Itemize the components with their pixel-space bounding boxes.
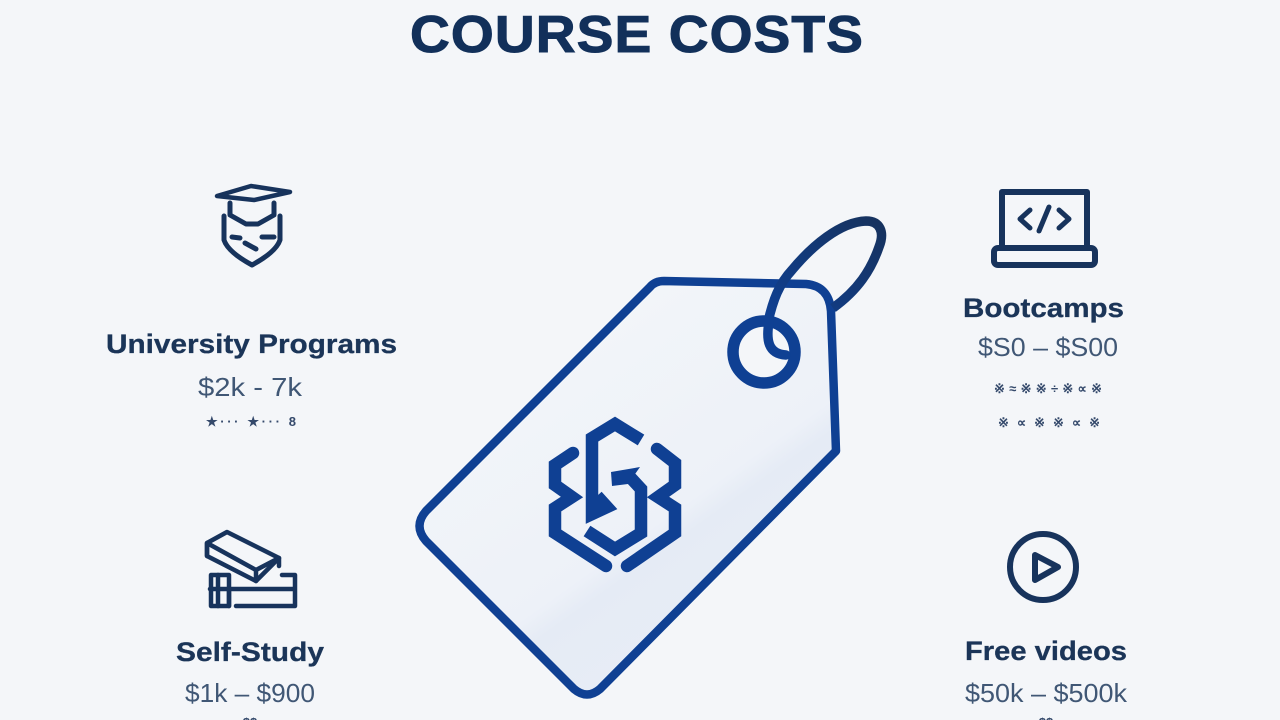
panel: university programs [106,186,397,429]
heading: Self-Study [176,637,324,667]
title: COURSE COSTS [410,6,864,64]
price tag illustration [420,221,881,694]
icon: laptop with code [994,192,1095,265]
panel: self-study [176,532,324,720]
icon: stacked books [207,532,295,606]
price range: $1k – $900 [185,678,315,708]
panel: free videos [965,534,1128,720]
tag string loop [768,221,881,322]
icon: graduation cap shield [217,186,290,265]
note line 1: ※≈※※÷※∝※ [994,381,1102,396]
string hook [768,322,786,355]
price range: $50k – $500k [965,678,1128,708]
heading: Free videos [965,636,1127,666]
panel: bootcamps [963,192,1124,430]
heading: Bootcamps [963,293,1124,323]
heading: University Programs [106,329,397,359]
price range: $2k - 7k [198,372,303,402]
tag eyelet [733,321,795,383]
tag body [420,281,836,694]
hexagon logo [555,424,675,566]
price range: $S0 – $S00 [978,332,1118,362]
note: ★··· ★··· 8 [206,414,296,429]
icon: play button [1010,534,1076,600]
note line 2: ※∝※※∝※ [998,415,1100,430]
